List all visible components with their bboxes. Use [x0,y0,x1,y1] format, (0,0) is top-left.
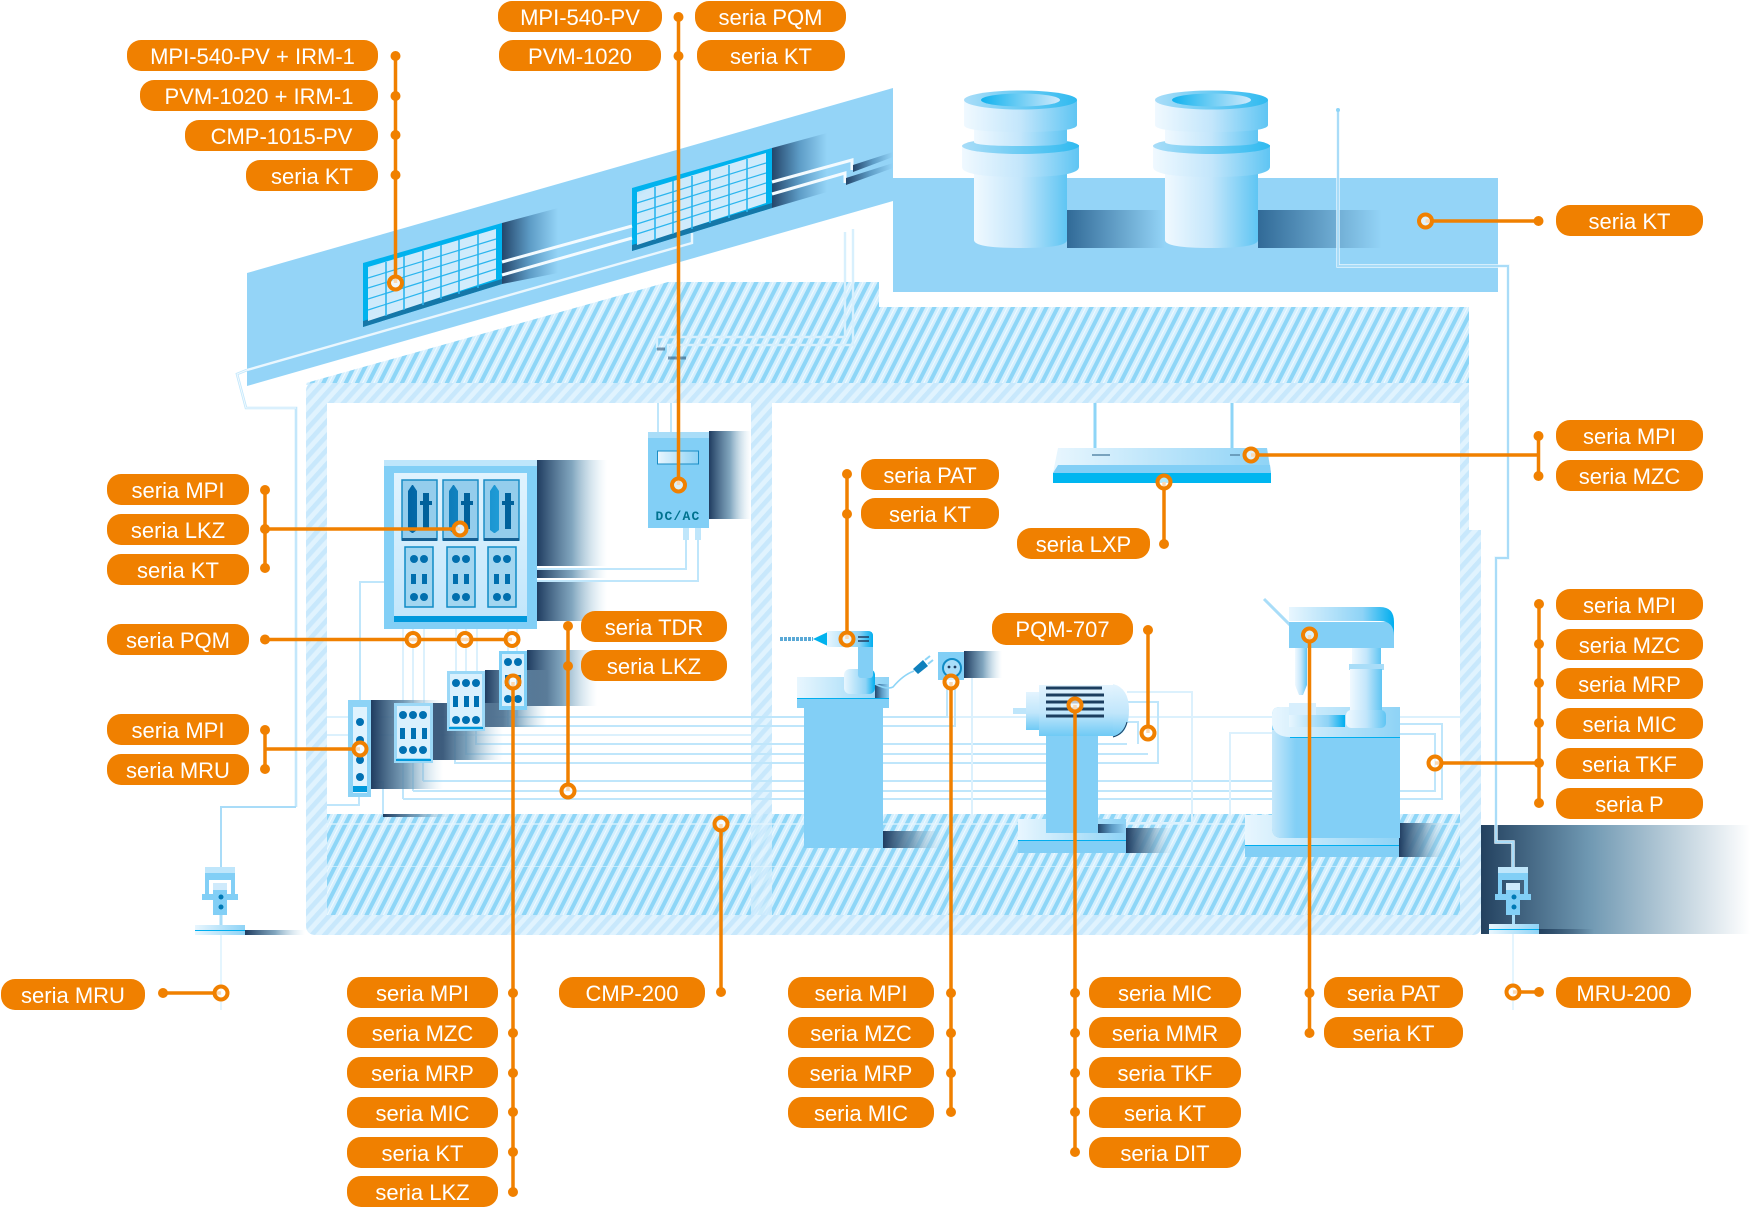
callout: machine tool head meters: seria PAT [1347,981,1440,1006]
solar panel 1 [363,208,558,327]
callout: cabinet meters: seria LKZ [131,518,225,543]
callout: solar panel meters: CMP-1015-PV [211,124,353,149]
callout: seria TDR, LKZ: seria LKZ [607,654,701,679]
callout: machine tool installation meters: seria MZC [1579,633,1680,658]
building walls [306,383,1481,935]
callout: socket meters: seria MPI [815,981,907,1006]
breakers top row [402,480,519,541]
callout: seria MPI, MRU [107,714,366,785]
roof [247,88,893,386]
callout: flat roof seria KT: seria KT [1589,209,1670,234]
module C [499,651,527,710]
earth electrode left [195,867,305,1010]
ceiling lamp [1053,403,1271,483]
callout: seria LXP: seria LXP [1036,532,1131,557]
callout: machine tool head meters [1303,628,1463,1048]
callout: seria MRU bottom left [1,979,228,1010]
callout: PQM-707: PQM-707 [1015,617,1110,642]
icon: power drill [780,631,875,694]
electric motor [1013,684,1173,853]
callout: module meters bottom: seria MIC [375,1101,470,1126]
callout: inverter meters: seria PQM [719,5,822,30]
callout: lamp meters: seria MPI [1583,424,1676,449]
machine tool [1245,599,1446,857]
callout: motor meters: seria KT [1124,1101,1206,1126]
floor hatching [327,814,1460,915]
vertical module left [348,700,371,797]
callout: module meters bottom: seria MZC [372,1021,473,1046]
callout: solar panel meters [127,40,402,290]
callout: seria MPI, MRU: seria MPI [132,718,224,743]
callout: machine tool installation meters: seria MIC [1582,712,1677,737]
flat roof block [893,178,1498,292]
callout: module meters bottom: seria MRP [371,1061,474,1086]
breakers bottom row [405,547,516,607]
callout: motor meters [1068,698,1241,1168]
callout: drill meters [840,459,999,646]
callout: seria LXP [1017,476,1170,559]
callout: MRU-200 [1506,977,1691,1008]
callout: seria TDR, LKZ [562,611,727,798]
callout: module meters bottom: seria MPI [376,981,469,1006]
inverter DC/AC [648,431,751,540]
roof wiring [221,152,893,868]
vent shadows on flat roof [1067,210,1382,248]
callout: machine tool installation meters: seria MPI [1583,593,1676,618]
inverter DC/AC: DC/AC [655,509,701,524]
drill stand [780,631,943,848]
earth electrode right [1489,867,1594,1010]
callout: inverter meters: PVM-1020 [528,44,632,69]
bottom right ground shadow [1481,825,1750,934]
callout: machine tool installation meters: seria P [1595,792,1664,817]
callout: solar panel meters: seria KT [271,164,353,189]
callout: seria TDR, LKZ: seria TDR [605,615,703,640]
callout: inverter meters: seria KT [730,44,812,69]
callout: machine tool installation meters: seria TKF [1582,752,1677,777]
callout: machine tool installation meters: seria MRP [1578,672,1681,697]
callout: motor meters: seria TKF [1118,1061,1212,1086]
callout: cabinet meters: seria KT [137,558,219,583]
module A [394,703,433,763]
callout: motor meters: seria MIC [1118,981,1212,1006]
callout: machine tool head meters: seria KT [1353,1021,1434,1046]
callout: drill meters: seria PAT [883,463,977,488]
callout: socket meters: seria MIC [814,1101,908,1126]
module B [447,671,485,731]
factory wiring [327,533,1460,823]
callout: lamp meters: seria MZC [1579,464,1680,489]
module shadows [371,650,597,817]
callout: socket meters: seria MZC [810,1021,912,1046]
callout: MRU-200: MRU-200 [1576,981,1671,1006]
callout: solar panel meters: MPI-540-PV + IRM-1 [150,44,355,69]
callout: machine tool installation meters [1428,589,1703,819]
callout: seria MRU bottom left: seria MRU [21,983,125,1008]
callout: seria MPI, MRU: seria MRU [126,758,230,783]
callout: seria PQM [107,624,518,655]
callout: module meters bottom: seria KT [382,1141,463,1166]
solar panel 2 [632,133,827,251]
callout: cabinet meters [107,474,466,585]
callout: solar panel meters: PVM-1020 + IRM-1 [165,84,353,109]
callout: drill meters: seria KT [889,502,971,527]
callout: CMP-200 [559,818,728,1008]
callout: motor meters: seria DIT [1120,1141,1210,1166]
lightning rod and earth wire [1336,108,1513,867]
callout: socket meters [788,676,958,1128]
callout: module meters bottom: seria LKZ [375,1180,470,1205]
callout: PQM-707 [992,613,1154,740]
icon: socket and plug [875,651,1002,688]
callout: motor meters: seria MMR [1112,1021,1218,1046]
callout: inverter meters: MPI-540-PV [520,5,640,30]
callout: CMP-200: CMP-200 [586,981,678,1006]
callout: inverter meters [498,1,846,492]
callout: flat roof seria KT [1419,205,1703,236]
roof vent 2 [1153,90,1270,248]
callout: lamp meters [1244,420,1703,491]
control cabinet [384,460,698,629]
callout: socket meters: seria MRP [810,1061,912,1086]
attic hatched ceiling [306,282,1469,385]
callout: seria PQM: seria PQM [126,628,230,653]
callout: cabinet meters: seria MPI [132,478,224,503]
roof vent 1 [962,90,1079,248]
callout: module meters bottom [347,676,520,1207]
